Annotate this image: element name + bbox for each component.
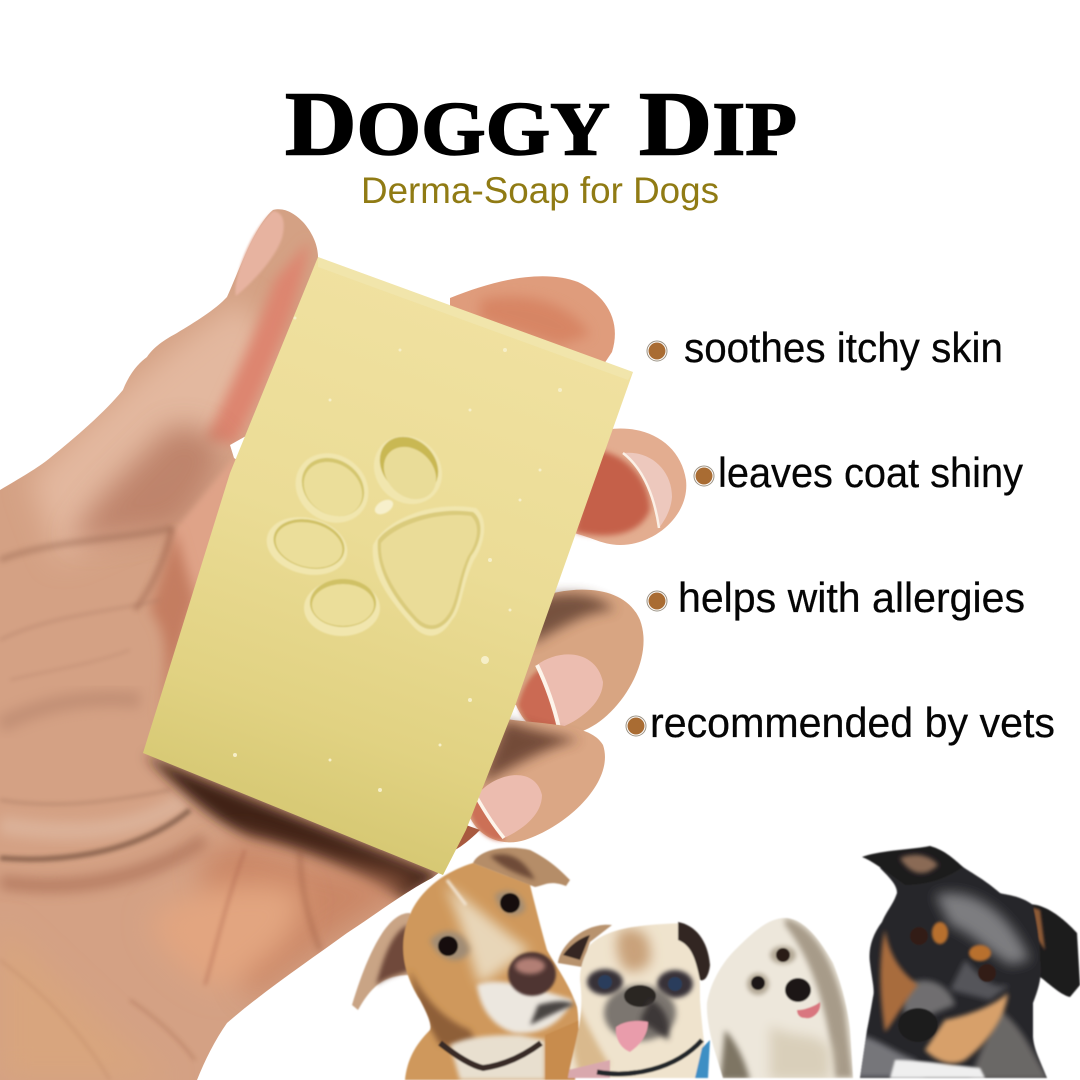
benefit: leaves coat shiny: leaves coat shiny <box>718 449 1023 496</box>
collar <box>440 1043 541 1068</box>
tongue <box>616 1021 648 1052</box>
soap speckles <box>233 257 633 792</box>
fingernail <box>623 453 672 528</box>
title: DOGGY <box>285 74 610 174</box>
soap bar <box>143 257 633 875</box>
ears <box>862 846 963 885</box>
title <box>285 74 797 174</box>
dog 2: pug <box>558 922 710 1080</box>
main pad <box>373 506 484 636</box>
title: DIP <box>639 74 797 174</box>
middle finger <box>560 429 686 545</box>
paw print imprint <box>260 422 484 636</box>
benefit: helps with allergies: helps with allergies <box>678 574 1025 621</box>
hand shading <box>0 240 440 1080</box>
dogs group <box>352 846 1080 1080</box>
nose <box>508 952 556 996</box>
toe 4 <box>304 579 380 636</box>
index finger behind soap <box>450 276 615 370</box>
sliver of palm under soap corner <box>455 825 480 850</box>
hand holding soap <box>0 209 686 1080</box>
eyes <box>438 936 458 956</box>
subtitle: Derma-Soap for Dogs <box>361 170 719 211</box>
dog 3: white fluffy <box>707 918 853 1080</box>
toe 2 <box>360 422 456 518</box>
benefit: recommended by vets: recommended by vets <box>650 699 1055 746</box>
fingernail <box>476 775 542 838</box>
thumbnail <box>235 211 284 296</box>
benefit: soothes itchy skin: soothes itchy skin <box>684 324 1003 371</box>
harness <box>597 1040 702 1074</box>
ring finger <box>500 590 644 736</box>
little finger <box>460 718 605 842</box>
paw chip <box>372 497 396 517</box>
soap body <box>143 257 633 875</box>
palm and thumb <box>0 209 440 1080</box>
dog 1: tan hound <box>352 848 580 1080</box>
tongue <box>797 1002 820 1018</box>
fingernail <box>537 654 603 728</box>
gap between thumb and palm <box>230 436 246 462</box>
toe 3 <box>260 509 354 583</box>
dog 4: merle <box>855 846 1080 1080</box>
markings and eyes <box>932 922 948 944</box>
toe 1 <box>282 439 382 537</box>
